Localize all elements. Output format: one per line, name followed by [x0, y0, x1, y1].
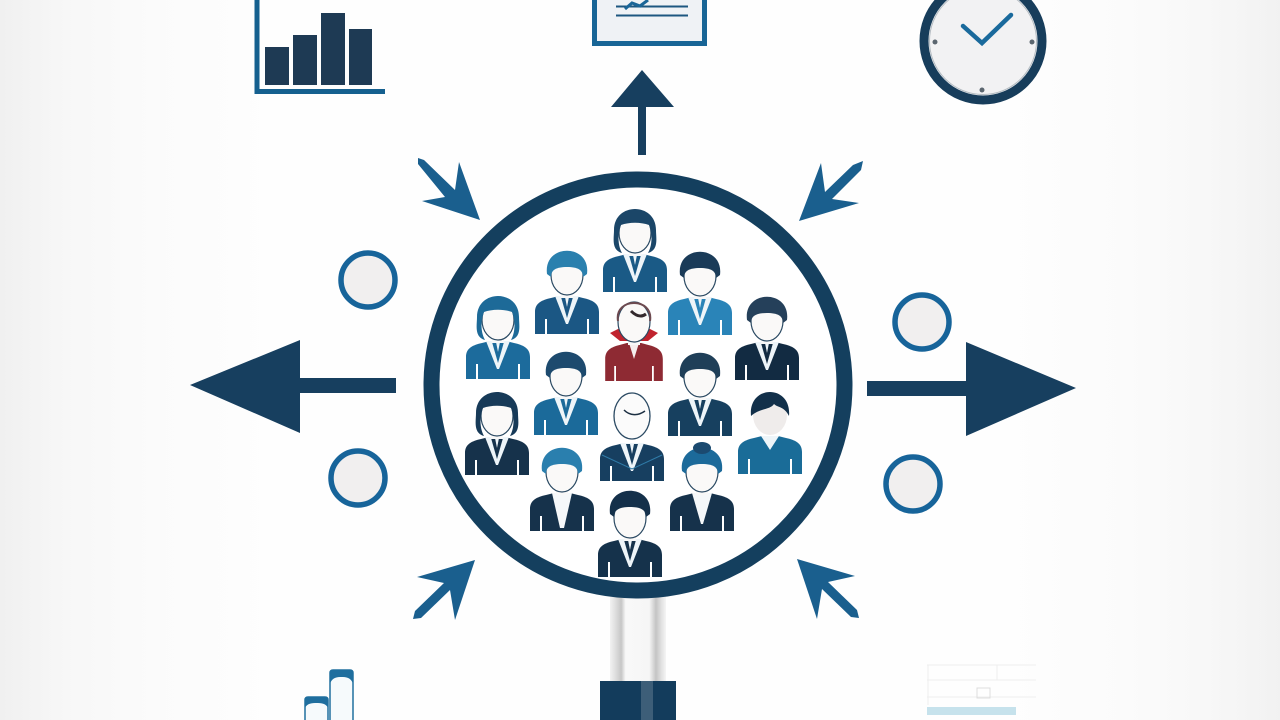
arrow: up: [611, 70, 674, 155]
person: row 5 far left: [465, 392, 529, 475]
group of people: [465, 209, 802, 577]
arrow: lower right: [797, 559, 859, 619]
person: row 4 right: [668, 353, 732, 436]
marker circle: lower left: [331, 451, 385, 505]
arrow: upper left: [418, 158, 480, 220]
marker circle: lower right: [886, 457, 940, 511]
icon: clock: [924, 0, 1042, 100]
person: highlighted red: [605, 302, 663, 381]
arrow: right: [867, 342, 1076, 436]
icon: bar chart: [257, 0, 385, 92]
person: top: [603, 209, 667, 292]
person: row 6 right: [670, 442, 734, 531]
person: row 4 left: [534, 352, 598, 435]
faint data table: [927, 665, 1036, 715]
arrow: upper right: [799, 161, 863, 221]
marker circle: upper right: [895, 295, 949, 349]
magnifier handle: [600, 594, 676, 720]
person: row 5 center: [600, 393, 664, 481]
person: row 2 left: [535, 251, 599, 334]
person: row 2 right: [668, 252, 732, 335]
arrow: lower left: [413, 560, 475, 620]
person: row 3 far left: [466, 296, 530, 379]
icon: document: [594, 0, 704, 44]
person: row 3 far right: [735, 297, 799, 380]
magnifying glass lens: [432, 180, 844, 590]
person: bottom: [598, 491, 662, 577]
person: row 5 far right: [738, 392, 802, 474]
person: row 6 left: [530, 448, 594, 531]
arrow: left: [190, 340, 396, 433]
marker circle: upper left: [341, 253, 395, 307]
icon: bottom left bars: [305, 670, 353, 720]
